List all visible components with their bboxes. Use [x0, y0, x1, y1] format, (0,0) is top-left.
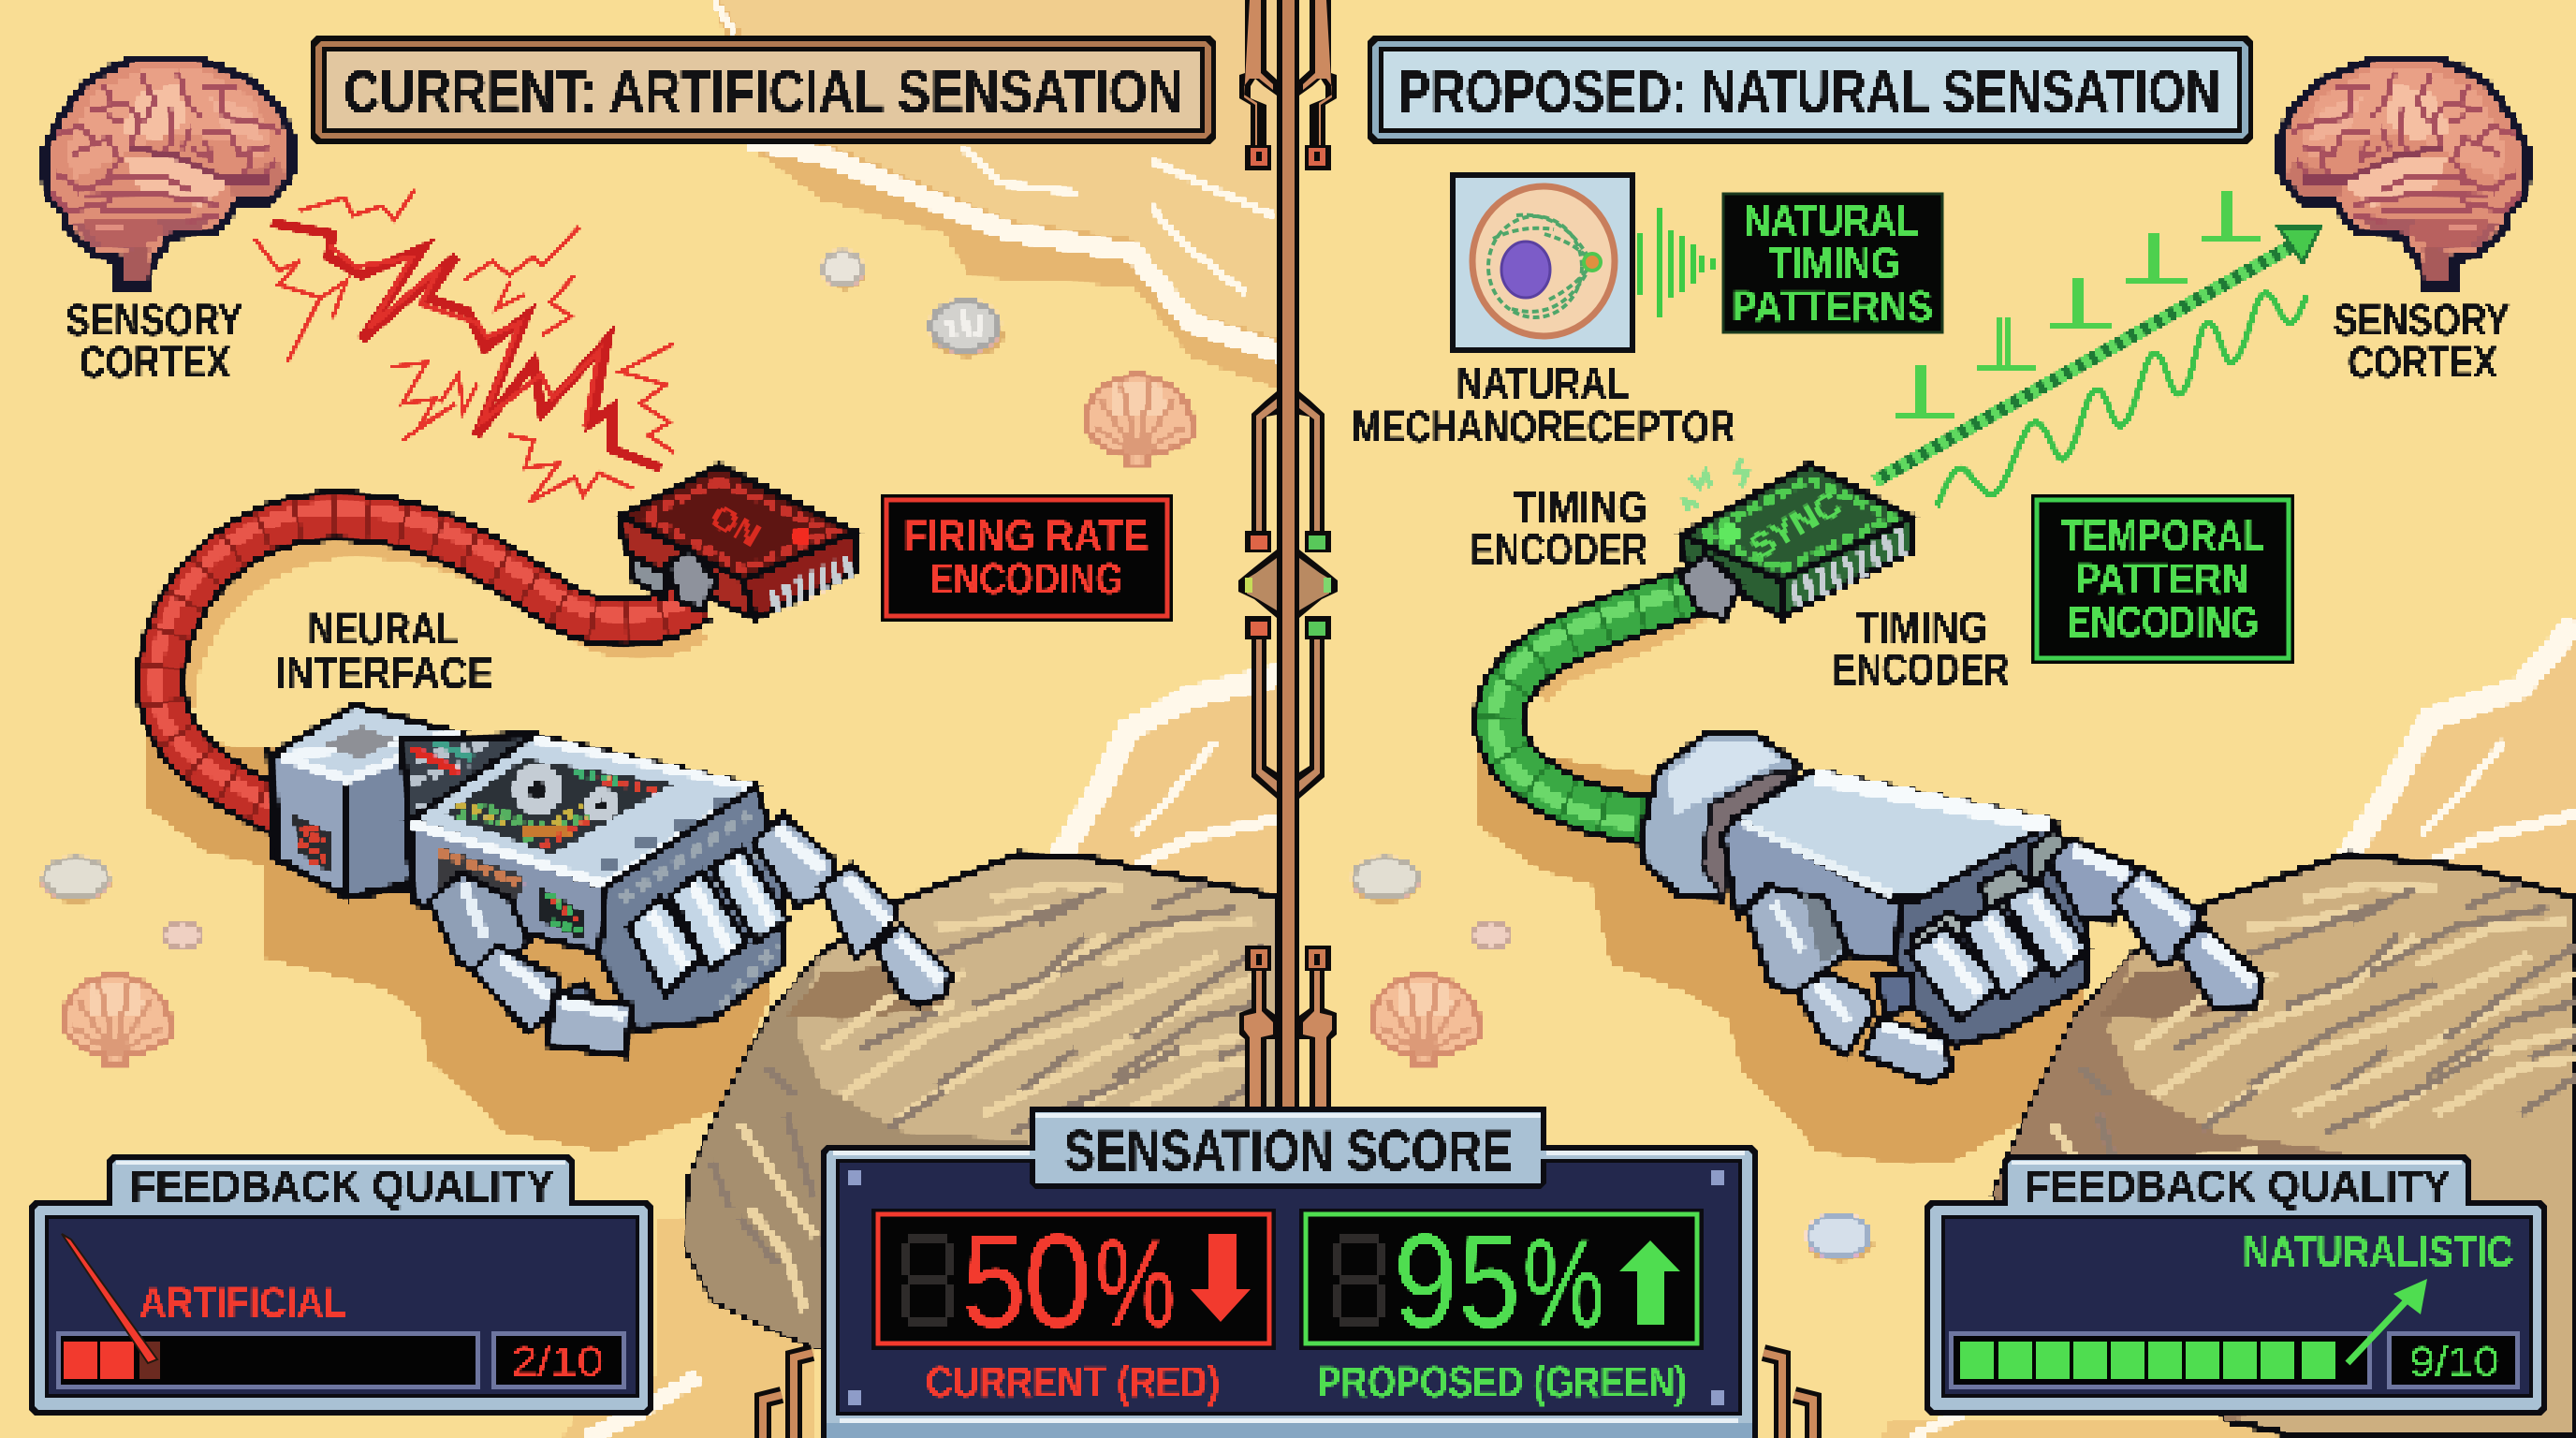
callout: firing rate encoding [881, 494, 1173, 622]
proposed score display: % [1523, 1214, 1604, 1354]
rock, left [686, 854, 1278, 1348]
callout: temporal pattern encoding: PATTERN [2075, 554, 2249, 603]
indicator needle [62, 1234, 157, 1363]
arrow: up [1619, 1240, 1680, 1325]
callout: temporal pattern encoding: ENCODING [2067, 597, 2259, 646]
proposed score display: 9 [1394, 1207, 1457, 1356]
label: neural interface: NEURAL [308, 604, 459, 653]
icon: red ON chip [621, 465, 855, 619]
score readout: 2/10 [511, 1339, 604, 1385]
label: timing encoder lower: ENCODER [1833, 644, 2009, 694]
quality bar 9 of 10 [1949, 1331, 2372, 1389]
temporal spike pulses [1895, 190, 2261, 415]
panel: sensation score: PROPOSED (GREEN) [1317, 1357, 1687, 1406]
center divider with circuit pipes [1238, 0, 1338, 1107]
current score display [873, 1207, 1274, 1356]
callout: temporal pattern encoding: TEMPORAL [2060, 511, 2265, 560]
icon: brain, left [44, 59, 293, 286]
score readout: 9/10 [2409, 1339, 2499, 1385]
score readout [491, 1331, 626, 1389]
current score display: % [1095, 1214, 1176, 1354]
callout: firing rate encoding: FIRING RATE [903, 511, 1149, 560]
rock, right [1994, 854, 2576, 1438]
callout: temporal pattern encoding [2031, 494, 2294, 664]
title text: PROPOSED: NATURAL SENSATION [1398, 58, 2220, 125]
arrow: rising indicator [2348, 1279, 2427, 1363]
icon: right smooth robotic hand [1641, 732, 2263, 1083]
label: neural interface: INTERFACE [275, 648, 493, 697]
green timing cable [1494, 580, 1713, 829]
proposed score display: 5 [1458, 1207, 1520, 1356]
chaotic red firing rate signal [255, 190, 674, 502]
label: neural interface [275, 604, 493, 697]
icon: green SYNC chip [1680, 464, 1912, 620]
panel: feedback quality, current [29, 1154, 653, 1416]
title banner: current [311, 36, 1216, 144]
right pipe set [1299, 0, 1338, 1107]
icon: left robotic hand with exposed circuitry [270, 705, 951, 1056]
label: timing encoder upper: TIMING [1514, 482, 1647, 532]
title banner: proposed [1368, 36, 2253, 144]
label: timing encoder lower [1833, 602, 2009, 694]
label: natural mechanoreceptor: NATURAL [1456, 359, 1629, 408]
label: sensory cortex right [2334, 295, 2510, 387]
arrow: signal rising to sensory cortex [1875, 227, 2320, 481]
cable and hand ground shadow, right [1475, 599, 2087, 1166]
cable and hand ground shadow, left [144, 541, 772, 1150]
red neural interface cable [155, 508, 697, 813]
divider status lights [1245, 148, 1331, 636]
label: timing encoder upper [1471, 482, 1647, 574]
label: sensory cortex left: CORTEX [80, 337, 230, 387]
sync sparks [1685, 459, 1747, 510]
current score display: 0 [1024, 1207, 1091, 1356]
chip label: ON: ON [704, 496, 767, 555]
quality bar 2 of 10 [56, 1331, 480, 1389]
panel: feedback quality, proposed [1925, 1154, 2547, 1416]
label: sensory cortex right: CORTEX [2348, 337, 2497, 387]
label: timing encoder upper: ENCODER [1471, 524, 1647, 574]
callout: natural timing patterns [1723, 194, 1942, 332]
title text: CURRENT: ARTIFICIAL SENSATION [344, 58, 1183, 125]
panel heading: FEEDBACK QUALITY [130, 1161, 554, 1211]
label: sensory cortex left [66, 295, 242, 387]
score readout [2387, 1331, 2520, 1389]
status label: NATURALISTIC [2243, 1227, 2513, 1276]
icon: left pebbles and shells [41, 252, 1193, 1066]
bottom sand patches and foam [562, 1208, 2303, 1438]
icon: right pebbles and shells [1351, 858, 1874, 1262]
left pipe set [1238, 0, 1277, 1107]
label: timing encoder lower: TIMING [1855, 602, 1988, 652]
callout: natural timing patterns: NATURAL [1744, 196, 1919, 244]
status label: ARTIFICIAL [139, 1279, 346, 1327]
callout: natural timing patterns: TIMING [1768, 239, 1900, 287]
lower copper wires beside score panel [763, 1353, 1813, 1438]
callout: firing rate encoding: ENCODING [929, 554, 1123, 603]
icon: natural mechanoreceptor cell [1450, 172, 1635, 353]
current score display: 5 [962, 1207, 1026, 1356]
smooth analog green wave [1937, 293, 2306, 506]
arrow: down [1191, 1234, 1251, 1322]
right shoreline: wet sand and foam [2348, 618, 2576, 1030]
proposed score display [1301, 1207, 1702, 1356]
callout: natural timing patterns: PATTERNS [1732, 282, 1933, 330]
panel: sensation score [821, 1107, 1758, 1438]
chip label: SYNC: SYNC [1743, 484, 1849, 567]
display captions: CURRENT (RED) [926, 1357, 1220, 1406]
signal artwork layer [255, 190, 2320, 510]
icon: brain, right [2279, 59, 2528, 286]
panel heading: SENSATION SCORE [1064, 1119, 1513, 1182]
label: sensory cortex left: SENSORY [66, 295, 242, 345]
left shoreline: wet sand and foam [711, 0, 1282, 1030]
corner bolts [848, 1170, 1724, 1405]
natural timing waveform [1603, 209, 1714, 318]
label: natural mechanoreceptor [1352, 359, 1735, 451]
panel heading: FEEDBACK QUALITY [2025, 1161, 2451, 1211]
label: natural mechanoreceptor: MECHANORECEPTOR [1352, 402, 1735, 451]
label: sensory cortex right: SENSORY [2334, 295, 2510, 345]
